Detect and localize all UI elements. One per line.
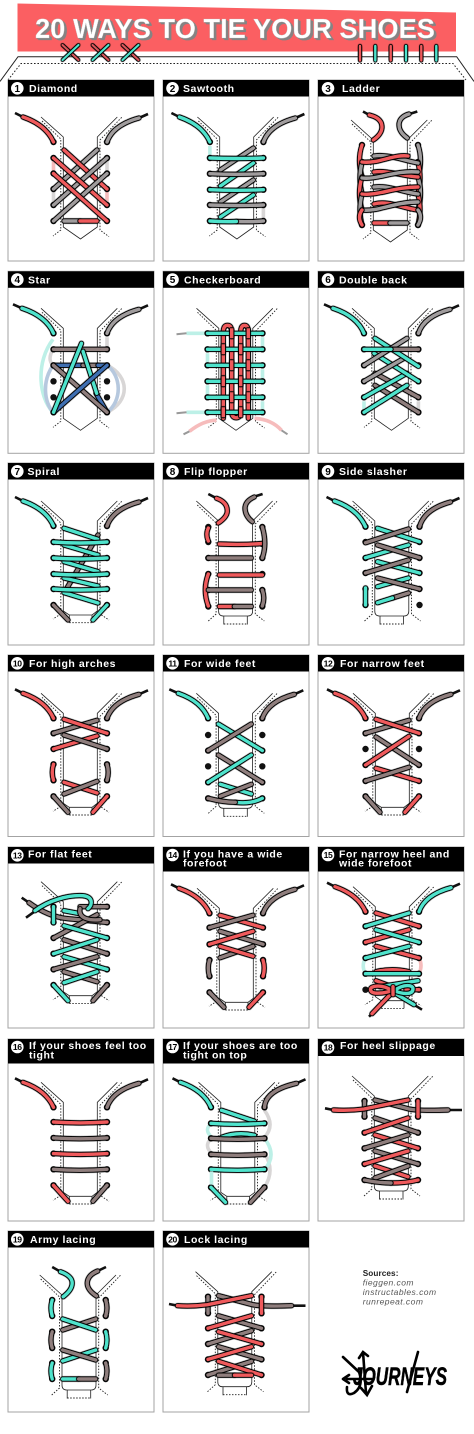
panel 12: For narrow feet — [318, 655, 464, 836]
panel 9: Side slasher — [318, 463, 464, 645]
heading: wide forefoot — [338, 858, 412, 870]
frame — [8, 463, 154, 645]
heading: Double back — [339, 274, 407, 286]
heading: 8 — [170, 467, 176, 478]
heading: 1 — [15, 84, 21, 95]
panel 4: Star — [8, 271, 154, 453]
heading: If your shoes feel too — [29, 1040, 147, 1052]
lacing diagram — [15, 1078, 148, 1204]
heading: 16 — [13, 1042, 22, 1052]
lacing diagram — [327, 883, 460, 1017]
lacing diagram — [327, 689, 460, 815]
heading: 15 — [324, 850, 333, 860]
lacing diagram — [15, 689, 148, 815]
heading — [8, 1231, 154, 1248]
panel 1: Diamond — [8, 80, 154, 261]
heading: For narrow feet — [340, 658, 425, 670]
lacing diagram — [325, 1076, 462, 1200]
heading: Lock lacing — [184, 1234, 248, 1246]
heading: 10 — [13, 659, 22, 669]
panel 2: Sawtooth — [163, 80, 309, 261]
frame — [163, 847, 309, 1028]
heading — [163, 80, 309, 96]
panel 16: If your shoes feel too tight — [8, 1039, 154, 1221]
lacing diagram — [169, 689, 303, 817]
lacing diagram — [13, 304, 148, 430]
heading: 13 — [13, 851, 22, 861]
heading: If you have a wide — [183, 848, 283, 860]
panel 11: For wide feet — [163, 655, 309, 836]
lacing diagram — [15, 113, 148, 239]
lacing diagram — [326, 497, 460, 624]
lacing diagram — [172, 1078, 306, 1204]
panel 8: Flip flopper — [163, 463, 309, 645]
frame — [163, 80, 309, 261]
panel 19: Army lacing — [8, 1231, 154, 1412]
heading — [8, 271, 154, 288]
heading: For flat feet — [28, 849, 92, 861]
heading — [163, 847, 309, 872]
lacing diagram — [169, 1272, 306, 1395]
heading: 4 — [15, 275, 21, 286]
heading: Army lacing — [30, 1234, 96, 1246]
lacing diagram — [171, 884, 304, 1010]
heading: 17 — [168, 1042, 177, 1052]
frame — [8, 847, 154, 1028]
heading — [8, 847, 154, 864]
panel 7: Spiral — [8, 463, 154, 645]
panel 6: Double back — [318, 271, 464, 453]
frame — [163, 1039, 309, 1221]
frame — [8, 1039, 154, 1221]
heading: 20 — [168, 1234, 177, 1244]
frame — [8, 1231, 154, 1412]
sources text: runrepeat.com — [363, 1296, 423, 1306]
heading — [8, 1039, 154, 1064]
frame — [163, 655, 309, 836]
heading: Sawtooth — [183, 83, 235, 95]
frame — [318, 1039, 464, 1221]
heading: Spiral — [28, 466, 60, 478]
panel 15: For narrow heel and wide forefoot — [318, 847, 464, 1028]
heading: For narrow heel and — [339, 848, 450, 860]
heading — [163, 1231, 309, 1248]
heading — [318, 271, 464, 288]
Journeys logo — [343, 1352, 447, 1395]
lacing diagram — [15, 497, 148, 623]
heading: Side slasher — [339, 466, 407, 478]
heading — [163, 463, 309, 480]
heading — [318, 463, 464, 480]
lacing diagram — [324, 304, 459, 430]
heading: For wide feet — [184, 658, 256, 670]
heading: Star — [28, 274, 51, 286]
heading: 7 — [15, 467, 21, 478]
sources text: Sources: — [363, 1269, 399, 1278]
decorative straight laces — [360, 46, 436, 60]
heading — [8, 655, 154, 672]
heading: 18 — [324, 1043, 333, 1053]
heading: Ladder — [342, 83, 380, 95]
heading: forefoot — [183, 858, 227, 870]
heading — [318, 847, 464, 872]
frame — [163, 1231, 309, 1412]
frame — [318, 655, 464, 836]
panel 10: For high arches — [8, 655, 154, 836]
heading — [163, 1039, 309, 1064]
panel 14: If you have a wide forefoot — [163, 847, 309, 1028]
frame — [8, 655, 154, 836]
heading: Flip flopper — [184, 466, 248, 478]
lacing diagram — [40, 1267, 120, 1398]
sources text: instructables.com — [363, 1287, 436, 1297]
heading — [8, 463, 154, 480]
shoe collar outline — [0, 57, 474, 82]
title banner — [18, 4, 456, 52]
heading — [318, 1039, 464, 1056]
lacing diagram — [351, 112, 432, 242]
heading: 14 — [168, 850, 177, 860]
frame — [318, 271, 464, 453]
frame — [318, 80, 464, 261]
heading — [163, 271, 309, 288]
heading: 6 — [325, 275, 331, 286]
lacing diagram — [176, 308, 288, 434]
heading: Checkerboard — [184, 274, 261, 286]
heading: 5 — [170, 275, 176, 286]
frame — [163, 463, 309, 645]
heading: tight — [29, 1049, 54, 1061]
heading: 12 — [324, 659, 333, 669]
panel 20: Lock lacing — [163, 1231, 309, 1412]
heading: 9 — [325, 467, 331, 478]
frame — [163, 271, 309, 453]
panel 13: For flat feet — [8, 847, 154, 1028]
heading: 11 — [168, 659, 177, 669]
frame — [318, 463, 464, 645]
panel 17: If your shoes are too tight on top — [163, 1039, 309, 1221]
heading: Diamond — [29, 83, 78, 95]
heading — [163, 655, 309, 672]
heading: 19 — [13, 1234, 22, 1244]
heading: For high arches — [29, 658, 116, 670]
heading — [318, 655, 464, 672]
heading: 3 — [325, 84, 331, 95]
heading: For heel slippage — [340, 1040, 436, 1052]
decorative crossed laces — [62, 45, 138, 60]
heading — [8, 80, 154, 96]
frame — [8, 271, 154, 453]
lacing diagram — [22, 882, 122, 1003]
panel 18: For heel slippage — [318, 1039, 464, 1221]
heading: If your shoes are too — [183, 1040, 298, 1052]
title: 20 WAYS TO TIE YOUR SHOES — [35, 13, 435, 44]
sources text — [363, 1269, 436, 1306]
panel 5: Checkerboard — [163, 271, 309, 453]
heading: tight on top — [183, 1049, 247, 1061]
heading: 2 — [170, 84, 176, 95]
heading — [318, 80, 464, 96]
lacing diagram — [196, 494, 277, 624]
panel 3: Ladder — [318, 80, 464, 261]
frame — [8, 80, 154, 261]
lacing diagram — [171, 113, 304, 239]
frame — [318, 847, 464, 1028]
sources text: fieggen.com — [363, 1278, 414, 1288]
